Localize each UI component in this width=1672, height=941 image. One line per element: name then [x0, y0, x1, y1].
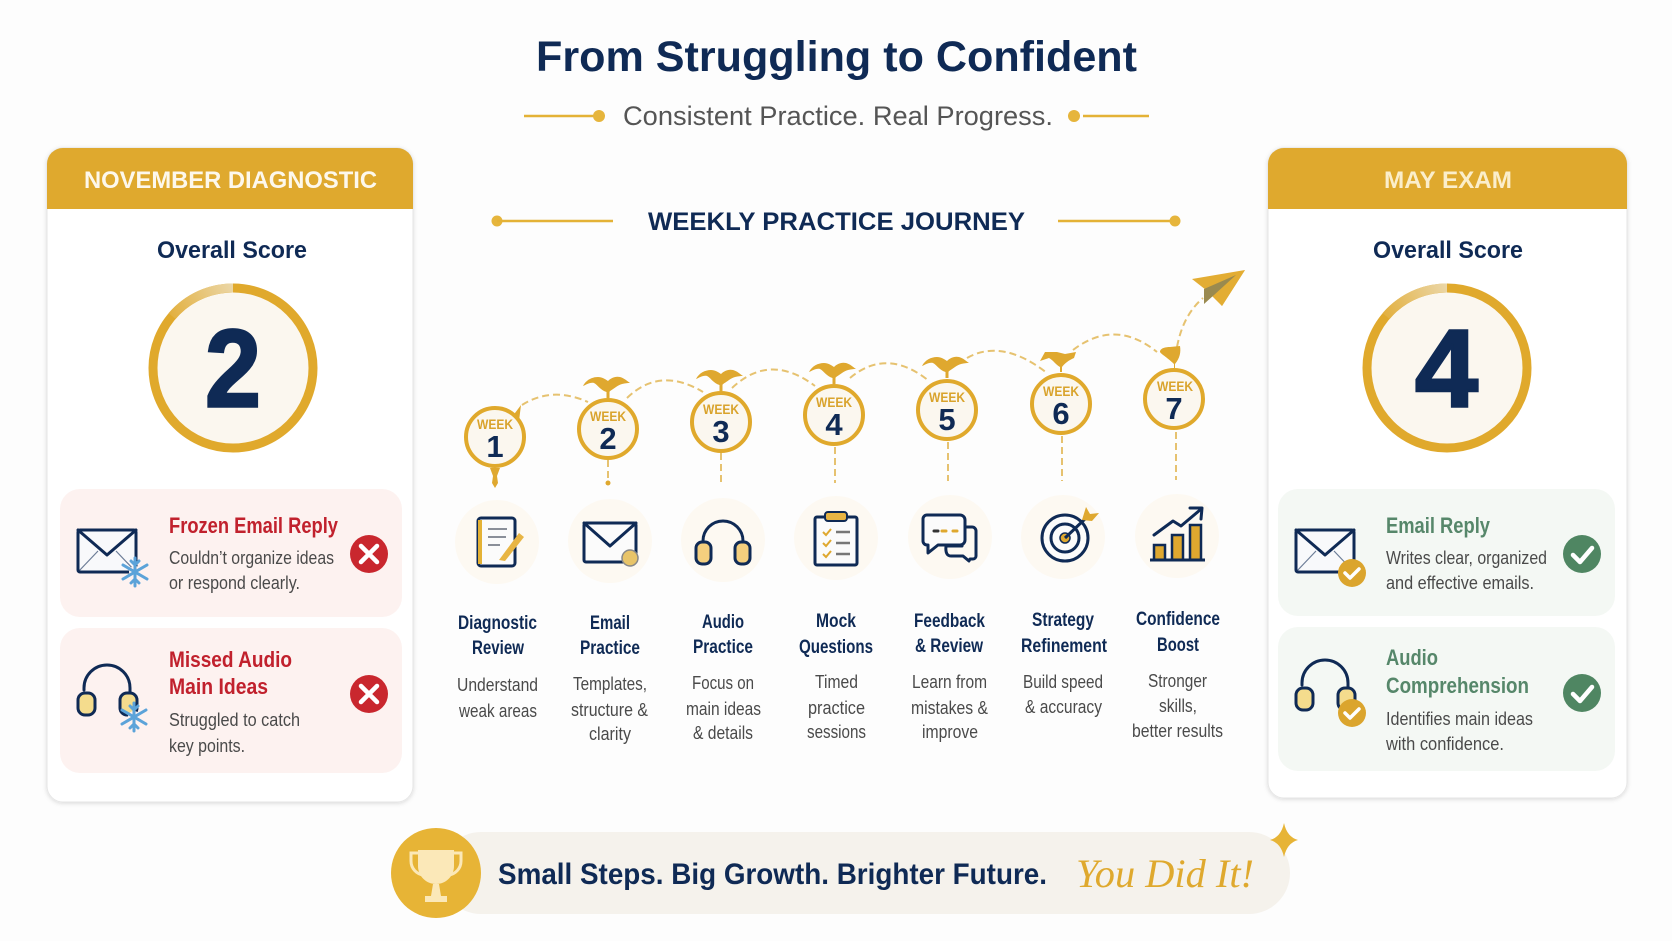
panel: May exam [1268, 148, 1627, 798]
week 7 marker: 7 [1165, 391, 1183, 426]
panel header: NOVEMBER DIAGNOSTIC [84, 167, 377, 194]
step 2: email practice: clarity [589, 724, 631, 744]
step 6: strategy refinement: Refinement [1021, 635, 1107, 657]
step 1: diagnostic review: weak areas [458, 701, 537, 721]
step 7: confidence boost: better results [1132, 721, 1223, 741]
step 4: mock questions: Questions [799, 636, 873, 658]
step 6: strategy refinement: Strategy [1032, 609, 1094, 631]
week 5 marker [918, 357, 976, 481]
step 4: mock questions: sessions [807, 722, 866, 742]
strength: audio comprehension: Audio [1386, 645, 1438, 670]
step 1: diagnostic review: Understand [457, 675, 538, 695]
panel header [47, 148, 413, 209]
step 6: strategy refinement: Build speed [1023, 672, 1103, 692]
step 4: mock questions: Mock [816, 610, 856, 632]
week 3 marker [692, 370, 750, 483]
week 6 marker: WEEK [1043, 384, 1079, 399]
icon: frozen headphones [78, 665, 146, 731]
step 2: email practice: Templates, [573, 674, 647, 694]
step 1: diagnostic review [455, 500, 539, 721]
weakness: missed audio main ideas: Missed Audio [169, 647, 292, 672]
panel header [1268, 148, 1627, 209]
icon: clipboard [815, 512, 857, 565]
step 5: feedback and review: & Review [915, 635, 984, 657]
heading: weekly practice journey [492, 208, 1180, 236]
week 1 marker [466, 405, 524, 488]
overall score label: Overall Score [157, 237, 307, 264]
score ring: 2 [153, 288, 313, 448]
step 4: mock questions [794, 496, 878, 742]
week 6 marker: 6 [1052, 396, 1070, 431]
panel: November diagnostic [47, 148, 413, 802]
week 3 marker: 3 [712, 414, 730, 449]
banner: closing message [391, 823, 1298, 918]
step 4: mock questions: practice [808, 698, 865, 718]
week 7 marker: WEEK [1157, 379, 1193, 394]
weakness: frozen email reply: or respond clearly. [169, 573, 300, 593]
step 1: diagnostic review: Review [472, 637, 525, 659]
week 4 marker: 4 [825, 407, 843, 442]
icon: paper plane [1192, 270, 1245, 306]
step 5: feedback and review [908, 495, 992, 742]
week 6 marker [1032, 352, 1090, 481]
step 3: audio practice [681, 498, 765, 743]
strength: email reply [1278, 489, 1615, 616]
step 7: confidence boost [1132, 494, 1223, 741]
icon: target with dart [1042, 507, 1099, 561]
step 7: confidence boost: skills, [1159, 696, 1197, 716]
week 3 marker: WEEK [703, 402, 739, 417]
icon: green check [1563, 674, 1601, 712]
heading: weekly practice journey: WEEKLY PRACTICE JOURNEY [648, 208, 1025, 236]
step 7: confidence boost: Stronger [1148, 671, 1207, 691]
icon: headphones with check [1296, 660, 1366, 727]
overall score label: Overall Score [1373, 237, 1523, 264]
weakness: frozen email reply: Couldn’t organize ideas [169, 548, 334, 568]
weakness: missed audio main ideas: key points. [169, 736, 245, 756]
week 5 marker: WEEK [929, 390, 965, 405]
weakness: frozen email reply: Frozen Email Reply [169, 513, 339, 538]
step 7: confidence boost: Confidence [1136, 608, 1220, 630]
icon: notebook and pencil [478, 518, 524, 566]
week 1 marker: 1 [486, 429, 504, 464]
step 3: audio practice: main ideas [686, 699, 761, 719]
weakness: missed audio main ideas: Main Ideas [169, 674, 268, 699]
step 2: email practice: Email [590, 612, 630, 634]
weakness: missed audio main ideas: Struggled to catch [169, 710, 300, 730]
step 6: strategy refinement [1021, 495, 1107, 717]
weakness: missed audio main ideas [60, 628, 402, 773]
week 4 marker [805, 363, 863, 483]
step 2: email practice: Practice [580, 637, 640, 659]
step 3: audio practice: Practice [693, 636, 753, 658]
week 1 marker: WEEK [477, 417, 513, 432]
strength: email reply: Email Reply [1386, 513, 1491, 538]
strength: email reply: Writes clear, organized [1386, 548, 1547, 568]
subtitle with decorative dots: Consistent Practice. Real Progress. [623, 101, 1053, 131]
strength: audio comprehension [1278, 627, 1615, 771]
banner: closing message: Small Steps. Big Growth. Brighter Future. [498, 858, 1047, 891]
step 5: feedback and review: improve [922, 722, 978, 742]
step 3: audio practice: Audio [702, 611, 744, 633]
week 2 marker: WEEK [590, 409, 626, 424]
icon: frozen envelope [78, 530, 147, 586]
step 4: mock questions: Timed [815, 672, 858, 692]
step 1: diagnostic review: Diagnostic [458, 612, 537, 634]
strength: audio comprehension: Comprehension [1386, 673, 1529, 698]
step 6: strategy refinement: & accuracy [1025, 697, 1102, 717]
icon: trophy [391, 828, 481, 918]
icon: red cross [350, 535, 388, 573]
banner: closing message: You Did It! [1076, 851, 1254, 896]
panel header: MAY EXAM [1384, 167, 1512, 194]
week 2 marker [579, 377, 637, 486]
week 4 marker: WEEK [816, 395, 852, 410]
icon: sparkle [1270, 823, 1298, 857]
icon: envelope [584, 523, 638, 566]
step 7: confidence boost: Boost [1157, 634, 1199, 656]
step 2: email practice: structure & [571, 700, 648, 720]
step 3: audio practice: & details [693, 723, 753, 743]
score ring: 2: 2 [205, 308, 261, 430]
subtitle with decorative dots [524, 101, 1149, 131]
step 5: feedback and review: Learn from [912, 672, 987, 692]
week 7 marker [1145, 346, 1203, 480]
weakness: frozen email reply [60, 489, 402, 617]
week 5 marker: 5 [938, 402, 956, 437]
title: From Struggling to Confident [536, 33, 1137, 81]
strength: audio comprehension: Identifies main ideas [1386, 709, 1533, 729]
strength: email reply: and effective emails. [1386, 573, 1534, 593]
week 2 marker: 2 [599, 421, 617, 456]
icon: speech bubbles [923, 515, 976, 561]
score ring: 4: 4 [1415, 308, 1478, 430]
icon: growth chart [1150, 508, 1205, 560]
step 5: feedback and review: Feedback [914, 610, 985, 632]
icon: green check [1563, 535, 1601, 573]
icon: envelope with check [1296, 530, 1366, 587]
score ring: 4 [1367, 288, 1527, 448]
journey path with dashed arcs [522, 298, 1203, 405]
step 5: feedback and review: mistakes & [911, 698, 988, 718]
step 2: email practice [568, 499, 652, 744]
icon: red cross [350, 675, 388, 713]
icon: headphones [696, 521, 750, 564]
strength: audio comprehension: with confidence. [1385, 734, 1504, 754]
step 3: audio practice: Focus on [692, 673, 754, 693]
